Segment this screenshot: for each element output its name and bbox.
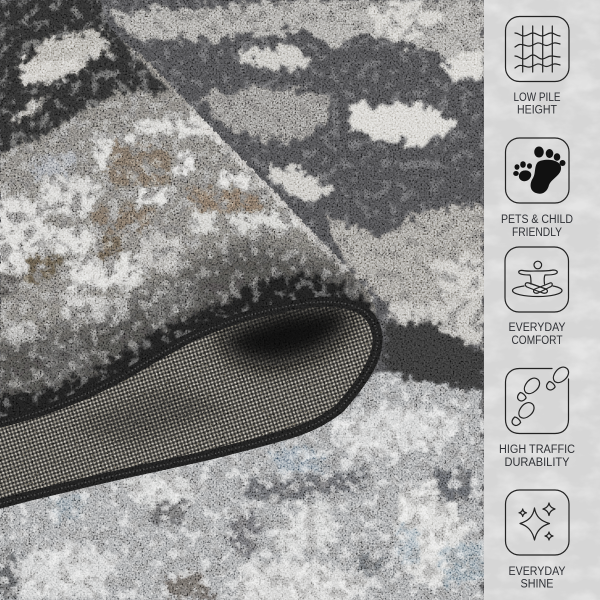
icon: meditating figure <box>505 247 568 312</box>
rolled rug: pale ridge rim <box>190 112 345 270</box>
background: dark medallion at right <box>385 322 484 392</box>
rolled rug: dark mottling <box>0 30 376 386</box>
background: rug pattern, dark upper area <box>110 0 484 350</box>
label: everyday shine <box>508 566 566 590</box>
underside: shadow inside the fold <box>70 303 352 445</box>
label: everyday shine: SHINE <box>520 578 554 590</box>
label: high traffic durability: HIGH TRAFFIC <box>499 444 575 456</box>
label: pets and child friendly: PETS & CHILD <box>501 214 573 226</box>
feature: low pile height <box>506 16 569 116</box>
icon: sparkles <box>506 490 569 555</box>
icon: shoe prints <box>506 364 571 434</box>
rolled rug: pale flower on shoulder <box>15 30 112 125</box>
label: pets and child friendly: FRIENDLY <box>512 227 562 239</box>
feature: high traffic durability <box>499 364 575 469</box>
rolled rug: pale speckle <box>0 0 400 430</box>
feature: pets and child friendly <box>501 138 573 239</box>
rolled rug: dark band by binding <box>0 274 390 430</box>
label: low pile height <box>514 92 561 116</box>
feature panel <box>484 0 600 600</box>
label: everyday comfort <box>508 322 566 347</box>
label: low pile height: LOW PILE <box>514 92 561 104</box>
label: everyday comfort: EVERYDAY <box>508 322 566 334</box>
rolled rug: shaded lower face <box>0 224 378 400</box>
background: faint speckle on dark field <box>0 0 484 400</box>
label: low pile height: HEIGHT <box>517 104 557 116</box>
background: lighter lower area <box>0 360 484 600</box>
feature: everyday shine <box>506 490 569 590</box>
feature: everyday comfort <box>505 247 568 347</box>
label: everyday comfort: COMFORT <box>512 335 562 347</box>
icon: paw and footprint <box>506 138 569 203</box>
rolled rug: patches <box>0 118 298 385</box>
lower area: pile mottling <box>0 360 484 600</box>
label: high traffic durability: DURABILITY <box>504 457 570 469</box>
rolled rug: black binding edge <box>0 302 378 505</box>
background: mottling on light motifs <box>115 0 484 345</box>
icon: pile fibres <box>506 16 569 82</box>
label: pets and child friendly <box>501 214 573 239</box>
rolled rug: woven underside <box>0 300 378 503</box>
label: everyday shine: EVERYDAY <box>508 566 566 578</box>
rolled rug: top face <box>0 0 400 430</box>
label: high traffic durability <box>499 444 575 469</box>
rolled rug: dark shoulder top left <box>0 0 172 155</box>
